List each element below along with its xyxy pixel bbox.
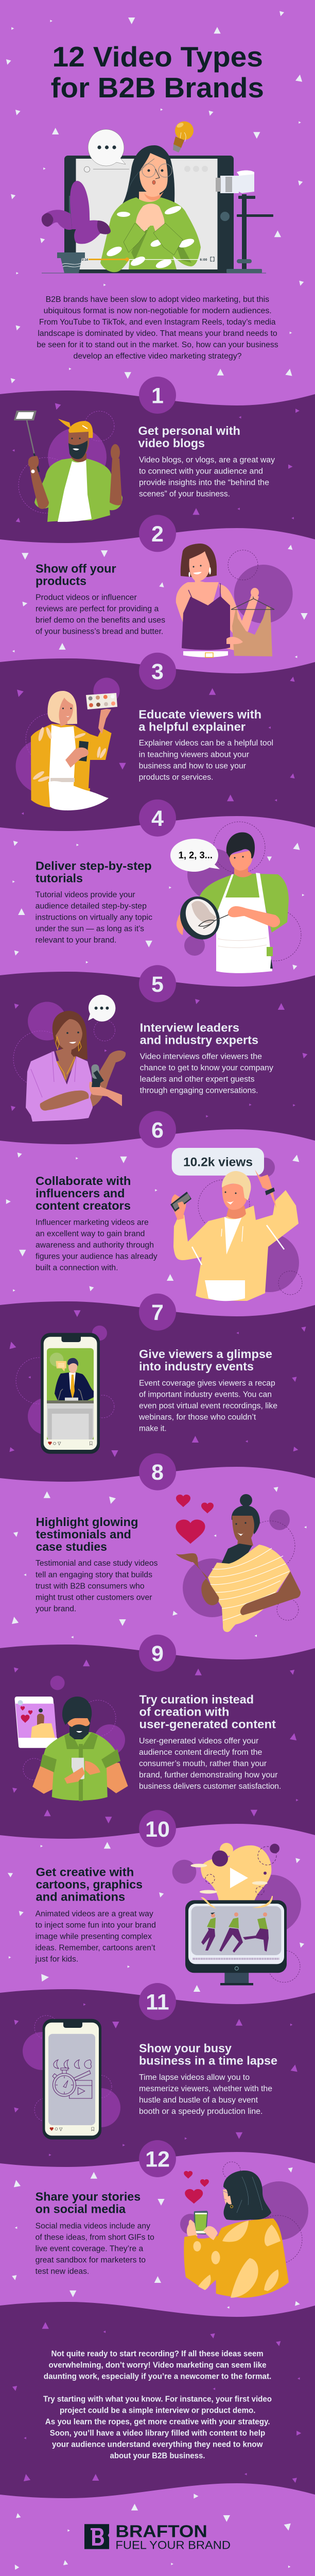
heading 7: Give viewers a glimpse — [139, 1347, 272, 1361]
closing paragraph: Soon, you’ll have a video library filled with content to help — [50, 2429, 265, 2437]
logo: Brafton — [84, 2521, 231, 2551]
heading 9: Try curation instead — [139, 1693, 254, 1706]
heading 10 — [36, 1866, 143, 1904]
body text 1: Video blogs, or vlogs, are a great way — [139, 455, 275, 464]
heading 8: case studies — [36, 1540, 107, 1553]
heading 6: influencers and — [36, 1187, 125, 1200]
number badge 2 — [139, 515, 176, 552]
closing paragraph: Try starting with what you know. For instance, your first video — [43, 2395, 272, 2403]
body text 9: consumer’s mouth, rather than your — [139, 1759, 267, 1768]
body text 8 — [36, 1559, 158, 1613]
heading 10: and animations — [36, 1890, 125, 1904]
heading 5: Interview leaders — [140, 1021, 239, 1035]
illustration 4: chef whisking in a bowl: 1, 2, 3... — [179, 850, 213, 860]
views pill — [172, 1148, 264, 1176]
number badge 7: 7 — [151, 1300, 164, 1325]
body text 7 — [138, 1379, 277, 1433]
body text 5: through engaging conversations. — [140, 1086, 258, 1095]
number badge 6 — [139, 1111, 176, 1148]
intro text: From YouTube to TikTok, and even Instagram Reels, today’s media — [39, 318, 276, 327]
body text 6: awareness and authority through — [36, 1241, 154, 1249]
heading 9 — [139, 1693, 276, 1731]
body text 6: figures your audience has already — [36, 1252, 157, 1261]
number badge 11: 11 — [146, 1990, 169, 2014]
body text 12: of these ideas, from short GIFs to — [36, 2233, 154, 2242]
number badge 11 — [139, 1983, 176, 2020]
body text 11: booth or a speedy production line. — [139, 2107, 262, 2116]
body text 7: webinars, for those who couldn’t — [138, 1413, 256, 1421]
intro text: develop an effective video marketing strategy? — [73, 352, 242, 361]
heading 8 — [36, 1515, 138, 1553]
closing paragraph: project could be a simple interview or product demo. — [60, 2406, 255, 2415]
body text 10: just for kids. — [35, 1955, 78, 1963]
body text 4: audience detailed step-by-step — [36, 902, 147, 910]
number badge 12: 12 — [145, 2147, 170, 2172]
number badge 5 — [139, 965, 176, 1002]
heading 9: user-generated content — [139, 1718, 276, 1731]
number badge 1: 1 — [151, 383, 164, 408]
heading 9: of creation with — [139, 1705, 229, 1719]
closing paragraph: Not quite ready to start recording? If all these ideas seem — [51, 2349, 264, 2358]
heading 7: into industry events — [139, 1360, 254, 1373]
hero illustration: woman on video screen: 6:00 — [200, 258, 207, 262]
body text 9: audience content directly from the — [139, 1748, 262, 1757]
hero illustration: woman on video screen — [42, 122, 273, 273]
heading 7 — [139, 1347, 272, 1373]
number badge 5: 5 — [151, 972, 164, 997]
number badge 4 — [139, 800, 176, 837]
body text 11: hustle and bustle of a busy event — [139, 2096, 258, 2105]
illustration 9: man reviewing user-generated content — [14, 1675, 128, 1801]
body text 8: trust with B2B consumers who — [36, 1582, 145, 1590]
number badge 4: 4 — [151, 806, 164, 831]
body text 4: instructions on virtually any topic — [36, 913, 152, 922]
closing paragraph: overwhelming, don’t worry! Video marketing can seem like — [48, 2361, 267, 2369]
body text 5: chance to get to know your company — [140, 1063, 273, 1072]
body text 11: Time lapse videos allow you to — [139, 2073, 250, 2082]
body text 12: Social media videos include any — [36, 2222, 150, 2230]
body text 10: ideas. Remember, cartoons aren’t — [36, 1943, 155, 1952]
heading 3 — [138, 707, 261, 733]
body text 10: image while presenting complex — [36, 1932, 152, 1941]
heading 1: Get personal with — [138, 424, 240, 437]
closing paragraph — [43, 2349, 272, 2460]
illustration 5: interviewer with microphone — [13, 995, 126, 1122]
body text 2: brief demo on the benefits and uses — [36, 616, 165, 624]
number badge 2: 2 — [151, 522, 164, 547]
heading 3: a helpful explainer — [138, 720, 246, 733]
heading 6: Collaborate with — [36, 1174, 131, 1188]
number badge 9 — [139, 1635, 176, 1672]
body text 12 — [36, 2222, 154, 2276]
logo: Brafton: FUEL YOUR BRAND — [115, 2538, 231, 2551]
illustration 3: woman presenting a colour palette — [15, 677, 120, 810]
body text 7: make it. — [139, 1424, 167, 1433]
title: 12 Video Types — [52, 41, 263, 73]
body text 6: Influencer marketing videos are — [36, 1218, 149, 1227]
intro text: be seen for it to stand out in the market. So, how can your business — [37, 341, 278, 349]
heading 4: Deliver step-by-step — [36, 859, 152, 873]
heading 5 — [140, 1021, 258, 1047]
number badge 1 — [139, 377, 176, 414]
body text 1: scenes” of your business. — [139, 489, 230, 498]
number badge 3 — [139, 653, 176, 690]
body text 4: Tutorial videos provide your — [36, 890, 135, 899]
heading 8: testimonials and — [36, 1528, 131, 1541]
number badge 12 — [139, 2140, 176, 2177]
body text 11 — [139, 2073, 272, 2116]
body text 7: even post virtual event recordings, like — [139, 1401, 277, 1410]
body text 6 — [36, 1218, 157, 1272]
illustration 12: woman on her phone seen from behind — [180, 2162, 308, 2298]
body text 4 — [36, 890, 152, 944]
heading 6: content creators — [36, 1199, 131, 1212]
body text 1 — [139, 455, 275, 498]
heading 11: Show your busy — [139, 2041, 232, 2055]
number badge 6: 6 — [151, 1118, 164, 1143]
body text 1: to connect with your audience and — [139, 467, 263, 476]
number badge 9: 9 — [151, 1641, 164, 1666]
heading 3: Educate viewers with — [138, 707, 261, 721]
body text 12: great sandbox for marketers to — [36, 2256, 146, 2264]
heading 12: Share your stories — [36, 2190, 141, 2204]
intro text: B2B brands have been slow to adopt video marketing, but this — [46, 295, 269, 304]
heading 2: Show off your — [36, 562, 116, 575]
body text 9: business delivers customer satisfaction. — [139, 1782, 281, 1791]
number badge 10 — [139, 1810, 176, 1847]
body text 3: business and how to use your — [139, 761, 246, 770]
body text 8: might trust other customers over — [36, 1593, 152, 1602]
body text 3: Explainer videos can be a helpful tool — [139, 739, 273, 748]
illustration 6: influencer pointing at view count — [170, 1148, 302, 1301]
title: for B2B Brands — [51, 72, 264, 104]
body text 2 — [36, 593, 165, 636]
views pill: 10.2k views — [183, 1155, 253, 1169]
number badge 7 — [139, 1294, 176, 1331]
illustration 8: woman with floating hearts — [176, 1494, 301, 1632]
number badge 8 — [139, 1453, 176, 1490]
body text 12: live event coverage. They’re a — [36, 2244, 144, 2253]
illustration 10: animation on a monitor — [172, 1843, 301, 1986]
illustration 4: chef whisking in a bowl — [170, 822, 301, 973]
body text 8: Testimonial and case study videos — [36, 1559, 158, 1568]
heading 10: cartoons, graphics — [36, 1878, 143, 1891]
body text 2: of your business’s bread and butter. — [36, 627, 163, 636]
heading 12: on social media — [36, 2202, 126, 2216]
body text 6: an excellent way to gain brand — [36, 1229, 145, 1238]
body text 6: built a connection with. — [36, 1263, 118, 1272]
body text 5 — [140, 1052, 273, 1095]
intro text — [37, 295, 278, 361]
closing paragraph: As you learn the ropes, get more creative with your strategy. — [45, 2417, 270, 2426]
heading 1 — [138, 424, 240, 450]
body text 3 — [139, 739, 273, 782]
body text 12: test new ideas. — [36, 2267, 89, 2276]
heading 2: products — [36, 574, 86, 588]
body text 2: Product videos or influencer — [36, 593, 137, 602]
title — [51, 41, 264, 104]
number badge 3: 3 — [151, 659, 164, 684]
body text 4: under the sun — as long as it’s — [36, 924, 144, 933]
intro text: ubiquitous format is now non-negotiable for modern audiences. — [44, 307, 272, 315]
body text 8: tell an engaging story that builds — [36, 1570, 152, 1579]
closing paragraph: daunting work, especially if you’re a newcomer to the format. — [44, 2372, 271, 2381]
heading 10: Get creative with — [36, 1866, 134, 1879]
heading 4: tutorials — [36, 872, 83, 885]
heading 5: and industry experts — [140, 1033, 258, 1047]
body text 10: to inject some fun into your brand — [36, 1921, 156, 1929]
illustration 1: vlogger with selfie stick — [14, 411, 122, 522]
body text 7: Event coverage gives viewers a recap — [139, 1379, 275, 1387]
body text 9: brand, further demonstrating how your — [139, 1771, 277, 1780]
body text 2: reviews are perfect for providing a — [36, 604, 159, 613]
intro text: landscape is dominated by video. That means your brand needs to — [38, 329, 277, 338]
body text 9 — [139, 1737, 281, 1791]
heading 12 — [36, 2190, 141, 2216]
body text 10: Animated videos are a great way — [36, 1909, 153, 1918]
body text 1: provide insights into the “behind the — [139, 478, 269, 487]
body text 7: of important industry events. You can — [139, 1390, 272, 1399]
illustration 7: phone showing conference speaker — [16, 1326, 114, 1454]
number badge 8: 8 — [151, 1460, 164, 1485]
illustration 2: woman holding a garment on a hanger — [176, 544, 293, 657]
body text 4: relevant to your brand. — [36, 936, 116, 944]
closing paragraph: your audience understand everything they need to know — [52, 2440, 263, 2449]
heading 11 — [139, 2041, 277, 2067]
heading 8: Highlight glowing — [36, 1515, 138, 1529]
body text 5: leaders and other expert guests — [140, 1075, 255, 1083]
heading 11: business in a time lapse — [139, 2054, 277, 2067]
body text 5: Video interviews offer viewers the — [140, 1052, 262, 1061]
body text 9: User-generated videos offer your — [139, 1737, 258, 1745]
body text 10 — [35, 1909, 156, 1963]
body text 3: products or services. — [139, 773, 213, 782]
number badge 10: 10 — [145, 1817, 170, 1842]
heading 4 — [36, 859, 152, 885]
logo: Brafton: BRAFTON — [115, 2521, 207, 2540]
hero illustration: woman on video screen: 2:14 — [82, 259, 89, 262]
body text 3: in teaching viewers about your — [139, 750, 249, 759]
body text 11: mesmerize viewers, whether with the — [139, 2084, 272, 2093]
illustration 11: phone with time lapse icon — [23, 2015, 120, 2140]
heading 6 — [36, 1174, 131, 1212]
body text 8: your brand. — [36, 1604, 76, 1613]
heading 2 — [36, 562, 116, 588]
closing paragraph: about your B2B business. — [110, 2451, 205, 2460]
heading 1: video blogs — [138, 436, 205, 450]
